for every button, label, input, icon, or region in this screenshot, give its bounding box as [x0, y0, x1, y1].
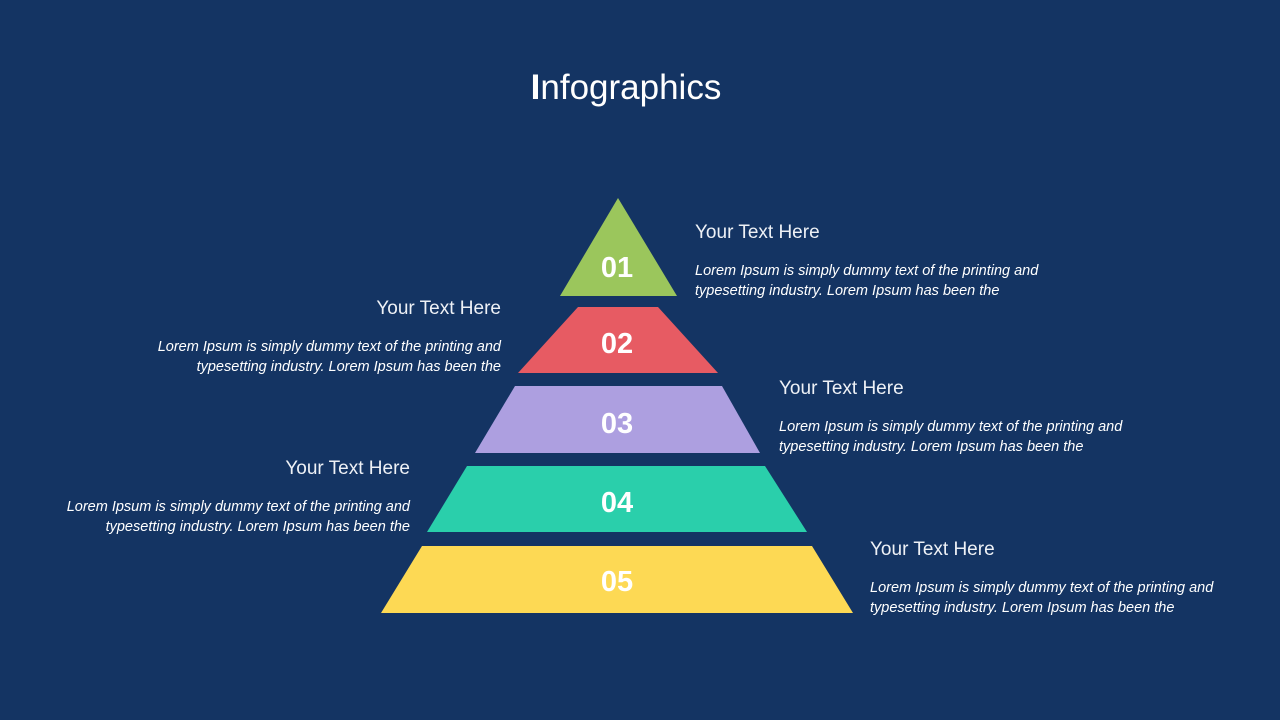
text block 03: Lorem Ipsum is simply dummy text of the printing and — [779, 419, 1122, 435]
title: Infographics — [531, 68, 721, 107]
text block 02: typesetting industry. Lorem Ipsum has been the — [197, 359, 501, 375]
text block 04: Your Text Here — [285, 458, 410, 479]
layer 01 — [560, 198, 677, 296]
layer 02 — [518, 307, 718, 373]
text block 01: Your Text Here — [695, 222, 820, 243]
text block 05: typesetting industry. Lorem Ipsum has been the — [870, 600, 1174, 616]
text block 03 — [779, 378, 1123, 455]
text block 05: Lorem Ipsum is simply dummy text of the printing and — [870, 580, 1213, 596]
text block 02: Lorem Ipsum is simply dummy text of the printing and — [158, 339, 501, 355]
layer 03: 03 — [601, 408, 633, 440]
text block 04: typesetting industry. Lorem Ipsum has been the — [106, 519, 410, 535]
text block 04: Lorem Ipsum is simply dummy text of the printing and — [67, 499, 410, 515]
text block 01: typesetting industry. Lorem Ipsum has been the — [695, 283, 999, 299]
text block 04 — [67, 458, 410, 535]
layer 04: 04 — [601, 487, 633, 519]
layer 01: 01 — [601, 252, 633, 284]
text block 01: Lorem Ipsum is simply dummy text of the printing and — [695, 263, 1038, 279]
text block 01 — [695, 222, 1039, 299]
text block 02 — [158, 298, 502, 375]
text block 02: Your Text Here — [376, 298, 501, 319]
text block 03: Your Text Here — [779, 378, 904, 399]
text block 03: typesetting industry. Lorem Ipsum has been the — [779, 439, 1083, 455]
layer 02: 02 — [601, 328, 633, 360]
text block 05 — [870, 539, 1214, 616]
layer 05 — [381, 546, 853, 613]
layer 05: 05 — [601, 566, 633, 598]
layer 03 — [475, 386, 760, 453]
text block 05: Your Text Here — [870, 539, 995, 560]
layer 04 — [427, 466, 807, 532]
